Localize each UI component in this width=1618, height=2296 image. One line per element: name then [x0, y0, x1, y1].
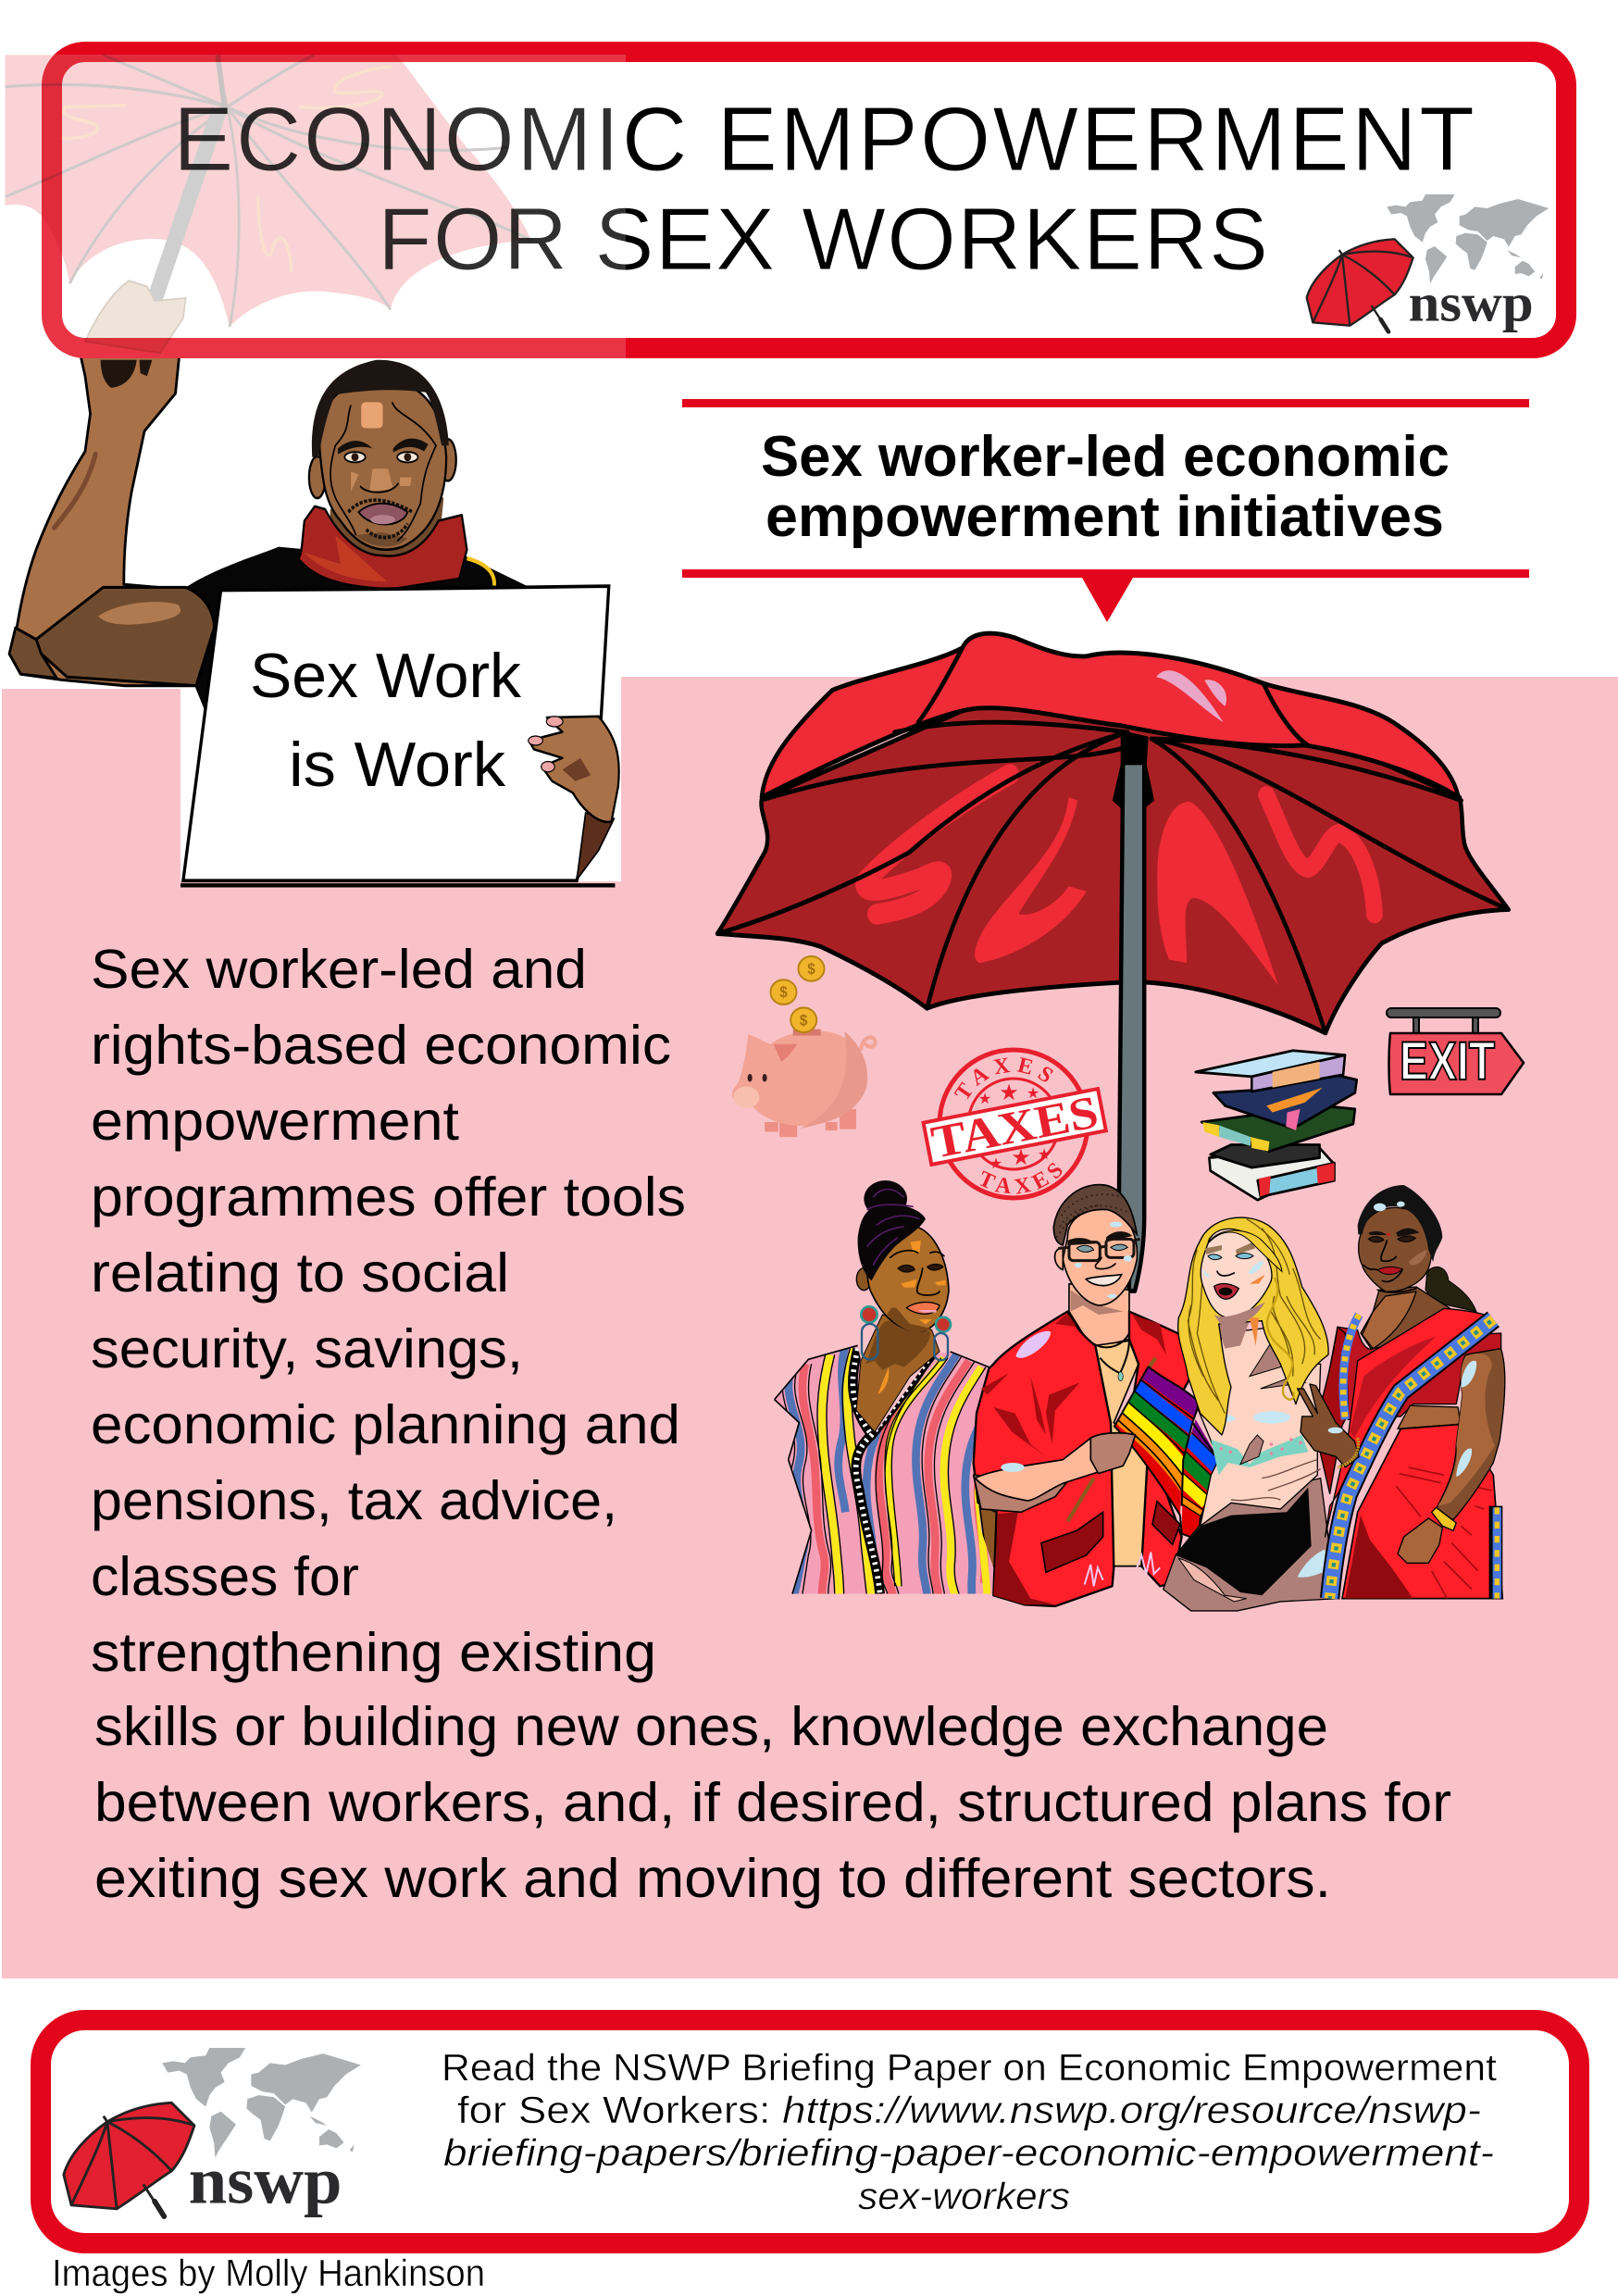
- coin symbols: $: [807, 960, 815, 978]
- woman 4: left sari edge: [1319, 1327, 1349, 1493]
- coin symbols: $: [779, 984, 788, 1001]
- woman 4: braid: [1425, 1267, 1476, 1312]
- woman 4: left band diamonds: [1343, 1315, 1359, 1419]
- arm behind: [979, 1506, 1009, 1567]
- man 2: forearm: [975, 1438, 1099, 1501]
- woman 1: chest and neck: [856, 1315, 940, 1432]
- faded umbrella behind title: [6, 55, 531, 353]
- faded umbrella pole: [152, 110, 219, 306]
- woman 3: lower hand: [1178, 1558, 1247, 1602]
- woman 1: eyes: [898, 1264, 943, 1272]
- man 2: flag outline: [1114, 1366, 1222, 1540]
- stamp stars: ★: [978, 1092, 991, 1107]
- title: [173, 88, 1475, 289]
- woman 4: sash band yellow diamonds: [1330, 1319, 1493, 1599]
- woman 3: face: [1201, 1229, 1272, 1318]
- woman 4: arm light: [1438, 1354, 1495, 1506]
- woman 4: head: [1359, 1207, 1432, 1292]
- woman 1: ear: [856, 1268, 871, 1291]
- man: lower lip highlight: [370, 515, 395, 524]
- man 2: face highlights: [1075, 1222, 1132, 1298]
- green book spine blue: [1219, 1125, 1251, 1146]
- faded hand: [85, 281, 186, 353]
- woman 3: hair strands: [1188, 1219, 1321, 1414]
- woman 3: lower cloth: [1164, 1479, 1339, 1611]
- piggy coin slot: [793, 1029, 821, 1036]
- body text: classes for: [91, 1546, 359, 1607]
- woman 3: polka dots: [1220, 1438, 1302, 1455]
- woman 4: hand highlight: [1328, 1428, 1343, 1433]
- faded umbrella top: [218, 55, 224, 107]
- man: nose and cheeks: [351, 468, 412, 492]
- umbrella pole collar: [1113, 730, 1154, 810]
- person: woman in red sari: [1298, 1185, 1505, 1599]
- woman 1: right earring: [934, 1317, 951, 1360]
- woman 1: face shadow: [887, 1307, 932, 1332]
- stamp stars: ★: [1011, 1145, 1031, 1170]
- body text: Sex worker-led and: [91, 939, 587, 1000]
- man: nose outline: [360, 483, 398, 493]
- person: man with pride flag: [974, 1185, 1225, 1606]
- dress zipper band: [853, 1349, 932, 1594]
- umbrella highlight: [1156, 670, 1226, 722]
- woman 4: blouse: [1324, 1327, 1501, 1419]
- woman 3: hair back: [1178, 1217, 1328, 1435]
- woman 4: peace hand: [1298, 1384, 1359, 1467]
- nswp logo: footer: nswp: [189, 2145, 342, 2218]
- man 2: flag main: [1115, 1368, 1198, 1514]
- man 2: arm highlight: [1001, 1463, 1025, 1472]
- illustration: red umbrella: [717, 633, 1509, 1291]
- woman 3: body highlights: [1222, 1411, 1326, 1578]
- dress blue stripes: [785, 1348, 977, 1594]
- icon: exit sign: [1387, 1008, 1524, 1094]
- umbrella letter S: [865, 775, 1010, 914]
- sign text: [250, 641, 522, 800]
- woman 1: highlights: [901, 1241, 946, 1325]
- woman 4: upper arm: [1437, 1349, 1505, 1520]
- man 2: mouth: [1086, 1275, 1122, 1286]
- dress black stripe outlines: [782, 1349, 986, 1604]
- woman 4: eyes: [1368, 1236, 1415, 1242]
- man: forearm shading: [55, 455, 95, 528]
- piggy shading: [800, 1031, 867, 1129]
- woman 4: wrist bangle: [1338, 1438, 1358, 1467]
- man: jaw shadow: [356, 532, 407, 546]
- title: ECONOMIC EMPOWERMENT: [173, 88, 1475, 190]
- middle book pink: [1286, 1109, 1301, 1130]
- stamp rings: [940, 1050, 1088, 1198]
- woman 1: hair: [858, 1204, 926, 1280]
- man: moustache and goatee: [348, 500, 413, 538]
- man: scarf highlight: [305, 535, 387, 581]
- stamp curved text: TAXES: [953, 1057, 1053, 1100]
- panel: pink background: [2, 677, 1618, 1978]
- title: FOR SEX WORKERS: [378, 190, 1268, 289]
- piggy legs: [765, 1109, 856, 1137]
- woman 4: fist: [1398, 1518, 1442, 1563]
- coin symbols: $: [800, 1012, 808, 1029]
- woman 4: bracelet: [1432, 1507, 1456, 1530]
- sign board: [183, 586, 609, 880]
- woman 4: skirt: [1342, 1424, 1502, 1599]
- stamp stars: ★: [1027, 1086, 1039, 1102]
- woman 4: nose: [1381, 1241, 1396, 1261]
- man 2: shirt: [974, 1312, 1114, 1606]
- icon: stack of books: [1196, 1051, 1357, 1200]
- woman 3: nose: [1217, 1271, 1234, 1276]
- man: lips: [358, 504, 407, 524]
- bottom book red bands: [1259, 1163, 1335, 1197]
- woman 1: chest highlight: [877, 1367, 889, 1394]
- man 2: neck shadow: [1071, 1290, 1123, 1315]
- sign baseline: [180, 882, 615, 889]
- man: eyebrows: [338, 439, 429, 455]
- sign wrist: [577, 813, 614, 880]
- man 2: shirt shadow hem: [993, 1512, 1055, 1604]
- woman 1: hair strands: [867, 1190, 919, 1266]
- woman 3: belly folds: [1231, 1460, 1321, 1501]
- dress coral stripes: [798, 1359, 989, 1594]
- body text: [91, 939, 1451, 1909]
- woman 3: jaw shadow: [1214, 1303, 1265, 1329]
- piggy eyes: [748, 1074, 767, 1081]
- man: yellow necklace: [467, 558, 494, 585]
- faded umbrella canopy: [6, 55, 531, 327]
- woman 4: pleat lines: [1396, 1467, 1492, 1599]
- exit sign body: [1388, 1033, 1524, 1094]
- woman 4: skirt dark fold: [1345, 1516, 1413, 1599]
- title box: [52, 52, 1566, 348]
- nswp logo: footer: [64, 2048, 361, 2218]
- woman 4: lower right band: [1475, 1506, 1516, 1599]
- woman 3: open mouth: [1214, 1284, 1238, 1299]
- body text: exiting sex work and moving to different sectors.: [94, 1848, 1331, 1909]
- man: face outline details: [330, 402, 436, 541]
- faded umbrella letters: [55, 67, 392, 272]
- man 2: flag fold: [1181, 1419, 1216, 1536]
- piggy snout and ear: [733, 1086, 759, 1108]
- heading: initiatives: [682, 399, 1529, 622]
- man 2: shirt fold marks: [981, 1313, 1166, 1456]
- woman 4: lower right band diamonds: [1489, 1507, 1504, 1599]
- woman 3: shoulder shadows: [1250, 1342, 1305, 1389]
- footer text with link: for Sex Workers: https://www.nswp.org/resource/nswp-: [457, 2089, 1481, 2131]
- top book label: [1273, 1062, 1320, 1088]
- body text: rights-based economic: [91, 1015, 671, 1076]
- man: eyes: [344, 452, 417, 462]
- man: finger shadows: [101, 360, 152, 388]
- man 2: pockets: [1041, 1502, 1180, 1572]
- umbrella top dome: [762, 633, 1459, 797]
- umbrella pole: [1119, 763, 1144, 1291]
- stamp lower curved text: TAXES: [980, 1163, 1063, 1194]
- woman 4: sash band blue: [1330, 1319, 1493, 1599]
- illustration: man holding sign: [9, 353, 619, 885]
- nswp logo: title box: [1307, 194, 1549, 333]
- stamp stars: ★: [1038, 1147, 1051, 1163]
- woman 4: brows: [1368, 1229, 1419, 1237]
- green book spine colours: [1202, 1122, 1269, 1152]
- woman 3: mouth inside: [1219, 1288, 1232, 1295]
- woman 3: front hair: [1208, 1230, 1282, 1271]
- man: black t-shirt: [186, 547, 527, 715]
- woman 3: bra: [1211, 1435, 1308, 1475]
- footer box: [41, 2020, 1579, 2243]
- top book spine: [1251, 1055, 1345, 1092]
- exit bar: [1387, 1008, 1500, 1034]
- woman 4: left band: [1343, 1315, 1359, 1419]
- man 2: necklace: [1094, 1333, 1129, 1373]
- man 2: eyes: [1077, 1244, 1127, 1252]
- heading: initiatives: Sex worker-led economic: [761, 425, 1450, 489]
- stamp stars: [978, 1080, 1051, 1172]
- person: woman in striped dress: [774, 1180, 996, 1594]
- image credit: Images by Molly Hankinson: [52, 2252, 485, 2294]
- woman 1: neck shadow: [865, 1321, 930, 1370]
- piggy ear fold: [774, 1044, 797, 1062]
- sign hand: thumb shadow: [563, 758, 591, 781]
- umbrella underside: [717, 703, 1509, 1033]
- footer text with link: [442, 2046, 1498, 2217]
- coin symbols: [779, 960, 815, 1029]
- stamp stars: ★: [999, 1080, 1019, 1105]
- woman 1: face: [867, 1225, 949, 1331]
- footer text with link: briefing-papers/briefing-paper-economic-empowerment-: [443, 2131, 1494, 2174]
- coins: [770, 956, 825, 1032]
- man: forearm and raised hand: [10, 353, 217, 686]
- umbrella letter L: [975, 797, 1087, 963]
- bottom book spine: [1258, 1163, 1335, 1197]
- woman 4: hair: [1358, 1185, 1442, 1262]
- body text: security, savings,: [91, 1318, 523, 1379]
- woman 1: left earring: [861, 1306, 877, 1359]
- man: head: [319, 379, 446, 550]
- woman 4: red drape: [1326, 1308, 1484, 1537]
- body text: strengthening existing: [91, 1622, 656, 1683]
- man 2: hair texture: [1057, 1194, 1129, 1238]
- man 2: hand: [1090, 1433, 1136, 1474]
- man: ears: [309, 439, 456, 498]
- man: bicep highlight: [98, 602, 180, 625]
- icon: taxes stamp: [921, 1048, 1109, 1200]
- man 2: shirt right side: [1129, 1312, 1189, 1586]
- bottom book: [1209, 1148, 1335, 1200]
- nswp logo: title box: nswp: [1409, 273, 1534, 333]
- man: neck: [330, 498, 443, 570]
- woman 3: neck shadow: [1214, 1305, 1259, 1349]
- heading: initiatives: empowerment initiatives: [765, 485, 1444, 549]
- woman 4: lips: [1377, 1267, 1402, 1275]
- woman 1: dress outline: [775, 1345, 989, 1594]
- sign text: Sex Work: [250, 641, 522, 711]
- body text: pensions, tax advice,: [91, 1470, 617, 1531]
- woman 4: midriff: [1398, 1405, 1461, 1429]
- piggy body: [732, 1030, 866, 1126]
- woman 3: hand at chest: [1240, 1435, 1263, 1465]
- footer text with link: Read the NSWP Briefing Paper on Economic Empowerment: [442, 2046, 1498, 2089]
- woman 3: cheek highlights: [1201, 1261, 1263, 1277]
- green book: [1201, 1105, 1355, 1152]
- man 2: neck: [1069, 1284, 1129, 1349]
- man: hair: [312, 360, 449, 457]
- woman 4: neck and chest: [1361, 1287, 1450, 1352]
- body text: empowerment: [91, 1091, 459, 1152]
- woman 4: lower right band blue: [1484, 1507, 1510, 1599]
- man: upper arm: [36, 587, 214, 686]
- woman 3: eyes: [1208, 1254, 1253, 1260]
- middle book orange strip: [1266, 1088, 1323, 1112]
- translucent overlay on title box border: [5, 55, 626, 358]
- woman 4: drape shadow: [1350, 1336, 1437, 1438]
- man 2: shoulder highlight: [1015, 1331, 1051, 1358]
- man 2: flag stick: [1067, 1358, 1155, 1521]
- bottom book cover: [1211, 1145, 1320, 1167]
- piggy tail: [861, 1038, 876, 1051]
- faded umbrella ribs: [6, 55, 531, 327]
- woman 3: black skirt: [1176, 1488, 1312, 1595]
- body text: economic planning and: [91, 1394, 680, 1455]
- woman 1: lips: [906, 1303, 940, 1314]
- woman 1: brows: [890, 1251, 944, 1257]
- man 2: nose: [1095, 1257, 1115, 1269]
- woman 4: jaw line: [1363, 1266, 1416, 1292]
- umbrella letter A: [1157, 802, 1278, 986]
- woman 4: sash band black outline: [1330, 1319, 1493, 1599]
- exit text: EXIT: [1400, 1031, 1495, 1092]
- body text: programmes offer tools: [91, 1167, 686, 1228]
- woman 3: hair curl: [1267, 1278, 1294, 1400]
- dress zipper white teeth: [853, 1349, 932, 1594]
- woman 1: nose: [917, 1268, 940, 1295]
- woman 4: cheek shade: [1409, 1250, 1427, 1266]
- woman 3: orange tones: [1250, 1275, 1265, 1345]
- body text: relating to social: [91, 1242, 509, 1304]
- woman 1: lip highlight: [918, 1310, 937, 1313]
- sign hand: nails: [529, 717, 563, 772]
- woman 1: hair bun: [864, 1180, 907, 1217]
- umbrella letter H: [1266, 795, 1375, 914]
- sign hand: [529, 717, 619, 822]
- umbrella dome seams: [918, 648, 1308, 745]
- man 2: chest: [1095, 1341, 1148, 1566]
- man 2: ear: [1055, 1248, 1063, 1270]
- woman 4: neck highlight: [1363, 1292, 1416, 1349]
- woman 3: torso: [1197, 1327, 1321, 1526]
- man: forehead highlight: [361, 402, 383, 428]
- man 2: hair: [1053, 1185, 1137, 1245]
- stamp inner ring: [968, 1079, 1059, 1169]
- woman 4: arm highlights: [1456, 1361, 1476, 1477]
- woman 4: forehead highlights: [1374, 1202, 1405, 1211]
- man: red scarf: [298, 506, 467, 589]
- woman 4: bindi: [1387, 1233, 1390, 1236]
- person: blonde woman: [1164, 1217, 1339, 1611]
- footer text with link: sex-workers: [858, 2175, 1070, 2217]
- dress yellow stripes: [818, 1348, 990, 1594]
- woman 4: sash band teal dots: [1330, 1321, 1491, 1599]
- man 2: arm underside: [974, 1475, 1067, 1512]
- man: elbow: [9, 628, 56, 678]
- stamp stars: ★: [989, 1156, 1002, 1172]
- dress: [776, 1346, 994, 1594]
- dress base: [771, 1342, 1000, 1599]
- umbrella ribs: [717, 722, 1509, 1033]
- man 2: squiggles: [1085, 1553, 1160, 1586]
- body text: between workers, and, if desired, structured plans for: [94, 1772, 1451, 1833]
- man 2: head: [1063, 1209, 1137, 1305]
- man 2: glasses: [1058, 1239, 1140, 1261]
- middle book: [1214, 1075, 1357, 1129]
- man 2: pendant: [1118, 1372, 1123, 1381]
- top book cover: [1196, 1051, 1345, 1077]
- stamp ribbon: TAXES: [927, 1085, 1102, 1168]
- body text: skills or building new ones, knowledge exchange: [94, 1696, 1328, 1757]
- man 2: eyebrows: [1067, 1231, 1132, 1245]
- icon: piggy bank with coins: [732, 956, 876, 1137]
- sign text: is Work: [289, 730, 506, 800]
- woman 3: brows: [1205, 1242, 1255, 1254]
